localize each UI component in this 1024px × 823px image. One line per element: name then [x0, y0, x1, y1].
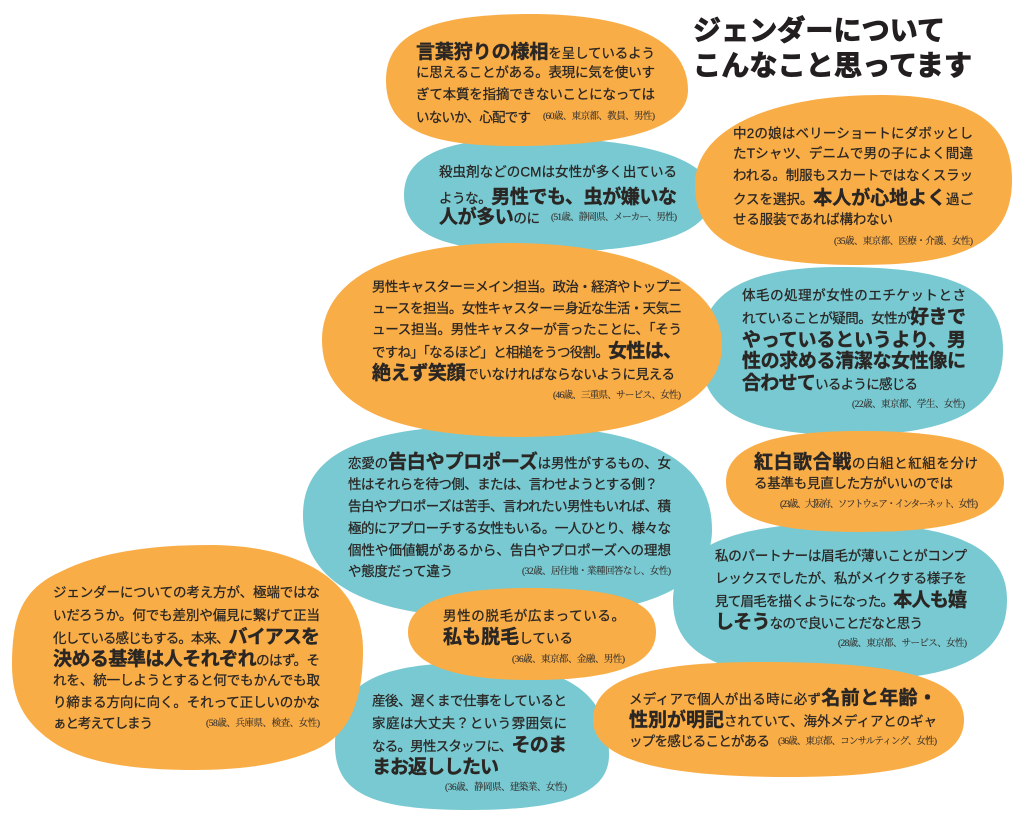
panel: bubble word hunting: に思えることがある。表現に気を使いす	[416, 64, 655, 80]
panel: bubble insecticide commercials: 人が多いのに	[439, 205, 540, 228]
panel: bubble confession and proposal: (32歳、居住地・業種回答なし、女性)	[522, 565, 671, 577]
panel: bubble confession and proposal: 個性や価値観があるから、告白やプロポーズへの理想	[348, 543, 671, 558]
panel: bubble insecticide commercials: 殺虫剤などのCMは女性が多く出ている	[439, 164, 677, 180]
panel: bubble news casters	[322, 243, 722, 437]
panel: bubble daughter's clothes: クスを選択。本人が心地よく過ご	[733, 186, 974, 209]
panel: bubble daughter's clothes	[695, 95, 1012, 265]
panel: bubble confession and proposal: 告白やプロポーズは苦手、言われたい男性もいれば、積	[348, 499, 672, 514]
panel: bubble male hair removal	[408, 588, 656, 680]
panel: bubble thinking about gender: れを、統一しようとすると何でもかんでも取	[53, 673, 320, 688]
panel: bubble partner eyebrows: しそうなので良いことだなと思う	[715, 612, 923, 633]
panel: bubble body hair: 性の求める清潔な女性像に	[742, 349, 966, 372]
panel: bubble media name and age: メディアで個人が出る時に必ず名前と年齢・	[629, 686, 937, 709]
panel: bubble thinking about gender: いだろうか。何でも差別や偏見に繋げて正当	[53, 608, 320, 623]
panel: bubble body hair: 体毛の処理が女性のエチケットとさ	[742, 288, 966, 303]
panel: bubble news casters: ですね」「なるほど」と相槌をうつ役割。女性は、	[372, 340, 682, 362]
panel: bubble male hair removal: 私も脱毛している	[443, 626, 573, 648]
panel: bubble body hair: 合わせているように感じる	[742, 372, 918, 394]
panel: bubble thinking about gender: ジェンダーについての考え方が、極端ではな	[53, 585, 320, 600]
panel: bubble confession and proposal: 極的にアプローチする女性もいる。一人ひとり、様々な	[348, 521, 671, 536]
title: こんなこと思ってます	[693, 50, 972, 81]
panel: bubble Kohaku song contest	[726, 431, 1004, 532]
panel: bubble confession and proposal: や態度だって違う	[348, 564, 453, 579]
panel: bubble thinking about gender: り締まる方向に向く。それって正しいのかな	[53, 695, 320, 710]
panel: bubble partner eyebrows: 見て眉毛を描くようになった。本人も嬉	[715, 589, 967, 611]
panel: bubble daughter's clothes: (35歳、東京都、医療・介護、女性)	[834, 235, 973, 247]
panel: bubble news casters: ュースを担当。女性キャスター＝身近な生活・天気ニ	[372, 301, 682, 316]
panel: bubble male hair removal: (36歳、東京都、金融、男性)	[512, 653, 625, 665]
title: ジェンダーについて	[693, 14, 945, 46]
panel: bubble partner eyebrows: 私のパートナーは眉毛が薄いことがコンプ	[715, 548, 968, 564]
panel: bubble confession and proposal: 性はそれらを待つ側、または、言わせようとする側？	[348, 477, 658, 492]
panel: bubble media name and age	[593, 662, 964, 777]
panel: bubble thinking about gender: 化している感じもする。本来、バイアスを	[53, 626, 320, 648]
panel: bubble thinking about gender: (58歳、兵庫県、検査、女性)	[206, 717, 320, 729]
panel: bubble word hunting: 言葉狩りの様相を呈しているよう	[416, 41, 655, 63]
panel: bubble media name and age: (36歳、東京都、コンサルティング、女性)	[778, 735, 937, 747]
panel: bubble Kohaku song contest: 紅白歌合戦の白組と紅組を分け	[754, 451, 978, 473]
panel: bubble pregnancy and work: まお返ししたい	[372, 756, 499, 778]
panel: bubble insecticide commercials: (51歳、静岡県、メーカー、男性)	[551, 211, 677, 223]
panel: bubble pregnancy and work: 家庭は大丈夫？という雰囲気に	[372, 715, 567, 731]
panel: bubble thinking about gender	[12, 545, 363, 770]
panel: bubble media name and age: 性別が明記されていて、海外メディアとのギャ	[629, 708, 937, 731]
panel: bubble news casters: 男性キャスター＝メイン担当。政治・経済やトップニ	[372, 280, 682, 294]
panel: bubble insecticide commercials: ような。男性でも、虫が嫌いな	[439, 185, 677, 208]
panel: bubble insecticide commercials	[404, 138, 712, 252]
panel: bubble pregnancy and work: (36歳、静岡県、建築業、女性)	[445, 781, 567, 793]
panel: bubble news casters: 絶えず笑顔でいなければならないように見える	[372, 362, 675, 384]
panel: bubble word hunting: ぎて本質を指摘できないことになっては	[416, 87, 655, 102]
panel: bubble partner eyebrows: レックスでしたが、私がメイクする様子を	[715, 571, 967, 586]
panel: bubble media name and age: ップを感じることがある	[629, 733, 770, 749]
panel: bubble body hair	[700, 267, 1003, 435]
panel: bubble news casters: ュース担当。男性キャスターが言ったことに、「そう	[372, 322, 682, 337]
panel: bubble daughter's clothes: 中2の娘はベリーショートにダボッとし	[733, 126, 973, 141]
panel: bubble thinking about gender: ぁと考えてしまう	[53, 716, 153, 731]
panel: bubble Kohaku song contest: (23歳、大阪府、ソフトウェア・インターネット、女性)	[780, 498, 978, 510]
panel: bubble confession and proposal	[303, 425, 712, 618]
panel: bubble Kohaku song contest: る基準も見直した方がいいのでは	[754, 475, 953, 491]
panel: bubble daughter's clothes: せる服装であれば構わない	[733, 212, 893, 227]
panel: bubble word hunting: いないか、心配です	[416, 110, 531, 125]
panel: bubble partner eyebrows: (28歳、東京都、サービス、女性)	[838, 637, 967, 649]
panel: bubble partner eyebrows	[673, 523, 1007, 680]
panel: bubble word hunting: (60歳、東京都、教員、男性)	[543, 110, 655, 122]
panel: bubble daughter's clothes: たTシャツ、デニムで男の子によく間違	[733, 145, 973, 161]
panel: bubble pregnancy and work: 産後、遅くまで仕事をしていると	[372, 694, 567, 708]
panel: bubble body hair: れていることが疑問。女性が好きで	[742, 306, 966, 328]
panel: bubble pregnancy and work	[335, 663, 609, 810]
panel: bubble pregnancy and work: なる。男性スタッフに、そのま	[372, 735, 567, 756]
panel: bubble male hair removal: 男性の脱毛が広まっている。	[443, 608, 625, 624]
panel: bubble confession and proposal: 恋愛の告白やプロポーズは男性がするもの、女	[348, 450, 671, 473]
panel: bubble word hunting	[386, 14, 688, 146]
panel: bubble thinking about gender: 決める基準は人それぞれのはず。そ	[53, 648, 320, 670]
title	[693, 14, 972, 81]
panel: bubble body hair: (22歳、東京都、学生、女性)	[852, 398, 965, 410]
panel: bubble body hair: やっているというより、男	[742, 329, 966, 351]
panel: bubble daughter's clothes: われる。制服もスカートではなくスラッ	[733, 168, 973, 183]
panel: bubble news casters: (46歳、三重県、サービス、女性)	[553, 389, 681, 401]
